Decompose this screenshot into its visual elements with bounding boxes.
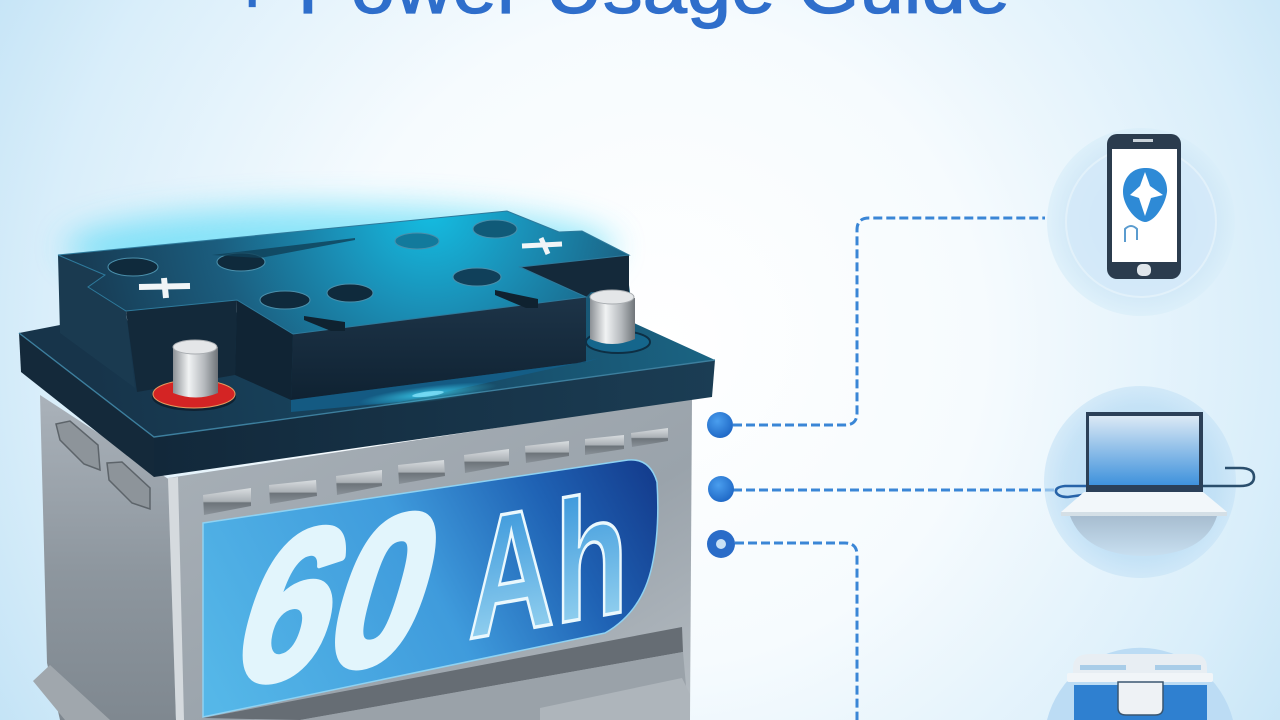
top slot: [212, 238, 355, 258]
battery glow: [65, 206, 615, 290]
laptop device: [1044, 386, 1254, 578]
upper block top: [58, 211, 629, 334]
vents: [203, 428, 668, 515]
cooler rim: [1067, 673, 1213, 682]
phone button: [1137, 264, 1151, 276]
battery case side: [40, 395, 176, 720]
upper block faces: [58, 255, 135, 388]
phone halo: [1047, 128, 1235, 316]
connector lines: [733, 218, 1056, 720]
phone screen: [1112, 149, 1177, 262]
cooler latch: [1118, 682, 1163, 715]
battery lid left: [19, 333, 154, 477]
laptop dome: [1070, 516, 1217, 556]
plus sign left: [139, 278, 190, 298]
battery lid front: [154, 360, 715, 477]
lid light flare: [291, 358, 600, 412]
small tabs: [304, 290, 538, 331]
bottom left foot: [33, 665, 110, 720]
red terminal: [152, 340, 236, 411]
phone small icon: [1125, 226, 1137, 242]
laptop cable: [1203, 468, 1254, 486]
cooler lid: [1073, 654, 1207, 674]
60 Ah label: [203, 460, 658, 717]
label text: Ah: Ah: [468, 455, 628, 676]
laptop base: [1061, 492, 1227, 516]
connector nodes: [707, 412, 735, 558]
cooler halo: [1047, 648, 1233, 720]
battery case front: [168, 398, 692, 720]
bottom band: [203, 627, 683, 720]
battery lid top: [19, 285, 715, 437]
cooler body: [1074, 685, 1207, 720]
plus sign right: [522, 238, 562, 254]
side handles: [56, 421, 150, 509]
laptop screen: [1086, 412, 1203, 492]
phone device: [1047, 128, 1235, 316]
battery: [19, 206, 715, 720]
laptop halo: [1044, 386, 1236, 578]
phone app icon: [1123, 168, 1167, 222]
phone body: [1107, 134, 1181, 279]
cooler device: [1047, 648, 1233, 720]
bottom right foot: [540, 678, 690, 720]
blue terminal: [586, 290, 650, 353]
cap circles: [108, 220, 517, 309]
